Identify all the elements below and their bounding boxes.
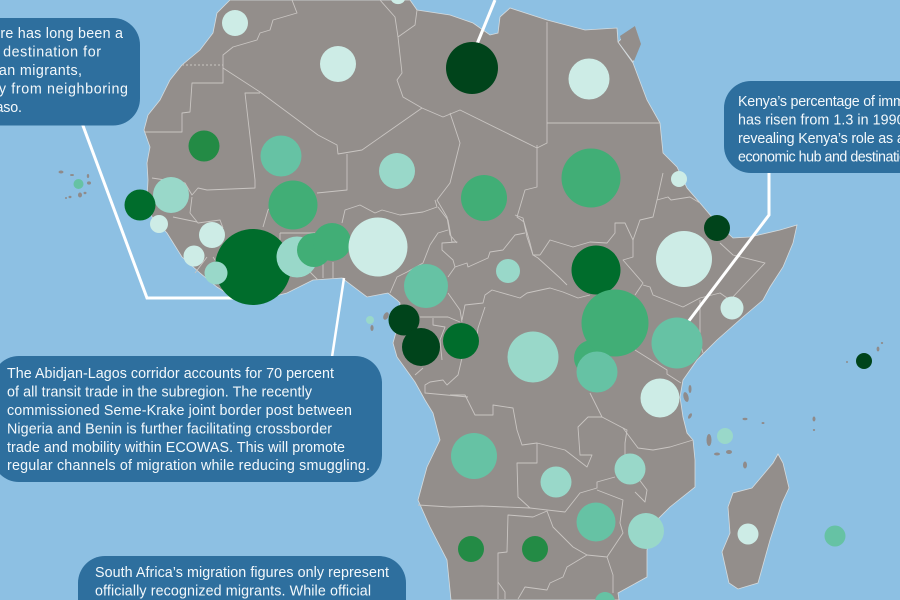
circle: Somalia	[720, 296, 744, 320]
circle: Sudan	[562, 148, 620, 208]
circle: Guinea	[199, 222, 225, 248]
circle: Mali	[260, 136, 302, 176]
leader line: Abidjan-Lagos callout	[332, 278, 344, 357]
callout: Abidjan-Lagos corridor: trade and mobility within ECOWAS. This will promote	[7, 440, 345, 456]
callout: Abidjan-Lagos corridor: regular channels of migration while reducing smuggling.	[7, 458, 370, 474]
circle: Sao Tome	[366, 316, 374, 324]
circle: Ghana	[276, 236, 318, 278]
circle: Eritrea	[671, 171, 687, 187]
circle: Niger	[379, 153, 415, 189]
circle: Burkina Faso	[268, 180, 318, 230]
circle: Sierra Leone	[184, 246, 204, 266]
circle: Gabon	[402, 328, 440, 366]
circle: Tunisia	[391, 0, 405, 4]
circle: South Africa	[595, 592, 615, 600]
circle: Madagascar	[738, 524, 758, 544]
circle: Tanzania	[640, 378, 680, 418]
circle: Chad	[461, 175, 507, 221]
circle: South Sudan	[572, 246, 620, 294]
circle: Cameroon	[404, 264, 448, 308]
circle: Liberia	[204, 262, 228, 284]
circle: Kenya	[652, 318, 702, 368]
islands	[58, 170, 883, 468]
landmass: Madagascar	[722, 454, 789, 589]
circle: Côte d'Ivoire	[215, 229, 291, 305]
callout: Abidjan-Lagos corridor: The Abidjan-Lagos corridor accounts for 70 percent	[7, 366, 334, 382]
circle: Congo	[443, 323, 479, 359]
landmass: African continent	[144, 0, 797, 600]
callout: Kenya	[724, 81, 900, 173]
leader line: Libya	[477, 0, 495, 44]
circle: Angola	[451, 433, 497, 479]
circle: Mauritania	[188, 130, 220, 162]
circle: Burundi	[576, 352, 618, 392]
callout: Abidjan-Lagos corridor: Nigeria and Benin is further facilitating crossborder	[7, 422, 332, 438]
leader line: Côte d'Ivoire callout	[82, 123, 240, 298]
circle: Mauritius	[824, 526, 846, 546]
circle: DR Congo	[508, 332, 558, 382]
circle: Seychelles	[856, 353, 872, 369]
circle: Central African Republic	[496, 259, 520, 283]
callout: Côte d'Ivoire	[0, 18, 140, 126]
circle: Senegal	[153, 177, 189, 213]
circle: Cape Verde	[74, 179, 84, 189]
circle: Togo	[297, 233, 331, 267]
circle: Equatorial Guinea	[388, 304, 420, 336]
circle: Nigeria	[348, 218, 408, 276]
circle: Botswana	[522, 536, 548, 562]
circle: Zimbabwe	[576, 502, 616, 542]
callout: Abidjan-Lagos corridor: of all transit trade in the subregion. The recently	[7, 384, 313, 400]
circle: Libya	[446, 42, 498, 94]
circle: Benin	[313, 223, 351, 261]
leader line: Kenya callout	[688, 172, 769, 322]
circle: Morocco	[222, 10, 248, 36]
circle: Gambia	[124, 190, 156, 220]
circle: Djibouti	[704, 215, 730, 241]
callout: Abidjan-Lagos corridor	[0, 356, 382, 482]
landmass: Sinai peninsula	[620, 26, 641, 61]
country borders	[145, 0, 765, 599]
callout: South Africa: South Africa’s migration figures only represent	[95, 565, 389, 581]
circle: Malawi	[614, 454, 646, 484]
circle: Rwanda	[574, 340, 610, 376]
callout: Abidjan-Lagos corridor: commissioned Seme-Krake joint border post between	[7, 403, 352, 419]
circle: Zambia	[540, 466, 572, 498]
circle: Uganda	[582, 290, 648, 356]
callout: South Africa: officially recognized migrants. While official	[95, 584, 371, 600]
circle: Guinea-Bissau	[150, 215, 168, 233]
circle: Algeria	[320, 46, 356, 82]
callout: South Africa	[78, 556, 406, 600]
circle: Namibia	[458, 536, 484, 562]
circle: Ethiopia	[656, 231, 712, 287]
circle: Mozambique	[628, 513, 664, 549]
circle: Egypt	[568, 58, 610, 100]
circle: Comoros	[717, 428, 733, 444]
